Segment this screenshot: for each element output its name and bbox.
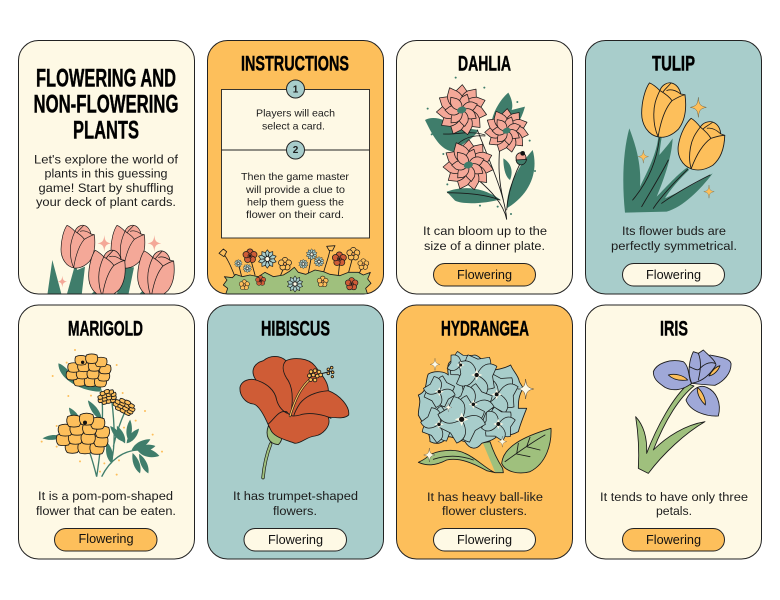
step 1 text — [256, 109, 335, 133]
step 2 badge: 2 — [293, 145, 299, 156]
title: FLOWERING AND — [36, 65, 176, 93]
button: flowering: Flowering — [457, 268, 512, 282]
intro text: game! Start by shuffling — [38, 181, 174, 195]
clue text: hydrangea: flower clusters. — [442, 504, 527, 518]
button: flowering: Flowering — [78, 532, 134, 546]
heading: iris: IRIS — [660, 318, 688, 341]
clue text: marigold — [36, 489, 176, 518]
icon: dahlia — [425, 77, 536, 219]
button: flowering — [622, 528, 724, 551]
step 1 badge: 1 — [293, 84, 299, 96]
button: flowering: Flowering — [457, 533, 512, 547]
title — [34, 65, 178, 144]
step 2 badge — [286, 141, 304, 159]
clue text: hibiscus: It has trumpet-shaped — [233, 489, 358, 503]
clue text: iris: It tends to have only three — [600, 490, 748, 504]
intro text: plants in this guessing — [44, 166, 168, 180]
panel: hibiscus card — [208, 305, 384, 559]
clue text: iris — [600, 490, 748, 518]
button: flowering: Flowering — [646, 533, 701, 547]
intro text: your deck of plant cards. — [36, 195, 176, 209]
panel: hydrangea card — [396, 305, 572, 559]
icon: hibiscus — [240, 356, 349, 478]
panel: iris card — [586, 305, 762, 559]
intro text: Let's explore the world of — [34, 152, 179, 166]
heading: instructions: INSTRUCTIONS — [241, 53, 349, 76]
step 1 text: select a card. — [262, 122, 325, 133]
panel: dahlia card — [396, 40, 572, 294]
heading: dahlia: DAHLIA — [458, 53, 511, 76]
step 2 text: help them guess the — [247, 198, 344, 208]
clue text: dahlia: size of a dinner plate. — [424, 239, 545, 253]
clue text: dahlia — [423, 224, 547, 253]
icon: flower garden — [219, 246, 371, 294]
title: PLANTS — [73, 116, 139, 144]
step 1 text: Players will each — [256, 109, 335, 120]
step 2 text: Then the game master — [241, 172, 350, 183]
clue text: marigold: It is a pom-pom-shaped — [38, 489, 173, 503]
button: flowering — [54, 528, 157, 551]
title: NON-FLOWERING — [34, 90, 178, 118]
heading: tulip: TULIP — [652, 53, 695, 76]
button: flowering: Flowering — [646, 268, 701, 282]
clue text: tulip: Its flower buds are — [622, 224, 726, 238]
clue text: tulip — [611, 224, 737, 253]
panel: steps box — [222, 90, 370, 238]
clue text: tulip: perfectly symmetrical. — [611, 239, 737, 253]
clue text: dahlia: It can bloom up to the — [423, 224, 547, 238]
icon: pink tulips — [47, 225, 174, 297]
step 2 text: will provide a clue to — [245, 185, 345, 196]
button: flowering — [434, 264, 536, 286]
heading: hydrangea: HYDRANGEA — [441, 318, 529, 341]
icon: marigold — [41, 349, 163, 477]
clue text: hydrangea: It has heavy ball-like — [427, 490, 543, 504]
panel: tulip card — [586, 40, 762, 294]
clue text: hydrangea — [427, 490, 543, 518]
panel: marigold card — [18, 305, 194, 559]
clue text: hibiscus — [233, 489, 358, 518]
clue text: marigold: flower that can be eaten. — [36, 504, 176, 518]
icon: hydrangea — [416, 349, 551, 473]
clue text: hibiscus: flowers. — [273, 504, 317, 518]
step 1 badge — [286, 80, 304, 98]
heading: hibiscus: HIBISCUS — [261, 318, 330, 341]
button: flowering — [434, 528, 536, 551]
clue text: iris: petals. — [656, 504, 692, 518]
panel: intro card — [18, 40, 194, 297]
button: flowering: Flowering — [268, 533, 323, 547]
icon: iris — [636, 350, 731, 473]
button: flowering — [622, 264, 724, 286]
intro text — [34, 152, 179, 209]
icon: tulip — [623, 83, 727, 213]
panel: instructions card — [208, 40, 384, 294]
step 2 text — [241, 172, 350, 221]
button: flowering — [244, 528, 346, 551]
step 2 text: flower on their card. — [246, 210, 344, 221]
heading: marigold: MARIGOLD — [68, 318, 143, 341]
